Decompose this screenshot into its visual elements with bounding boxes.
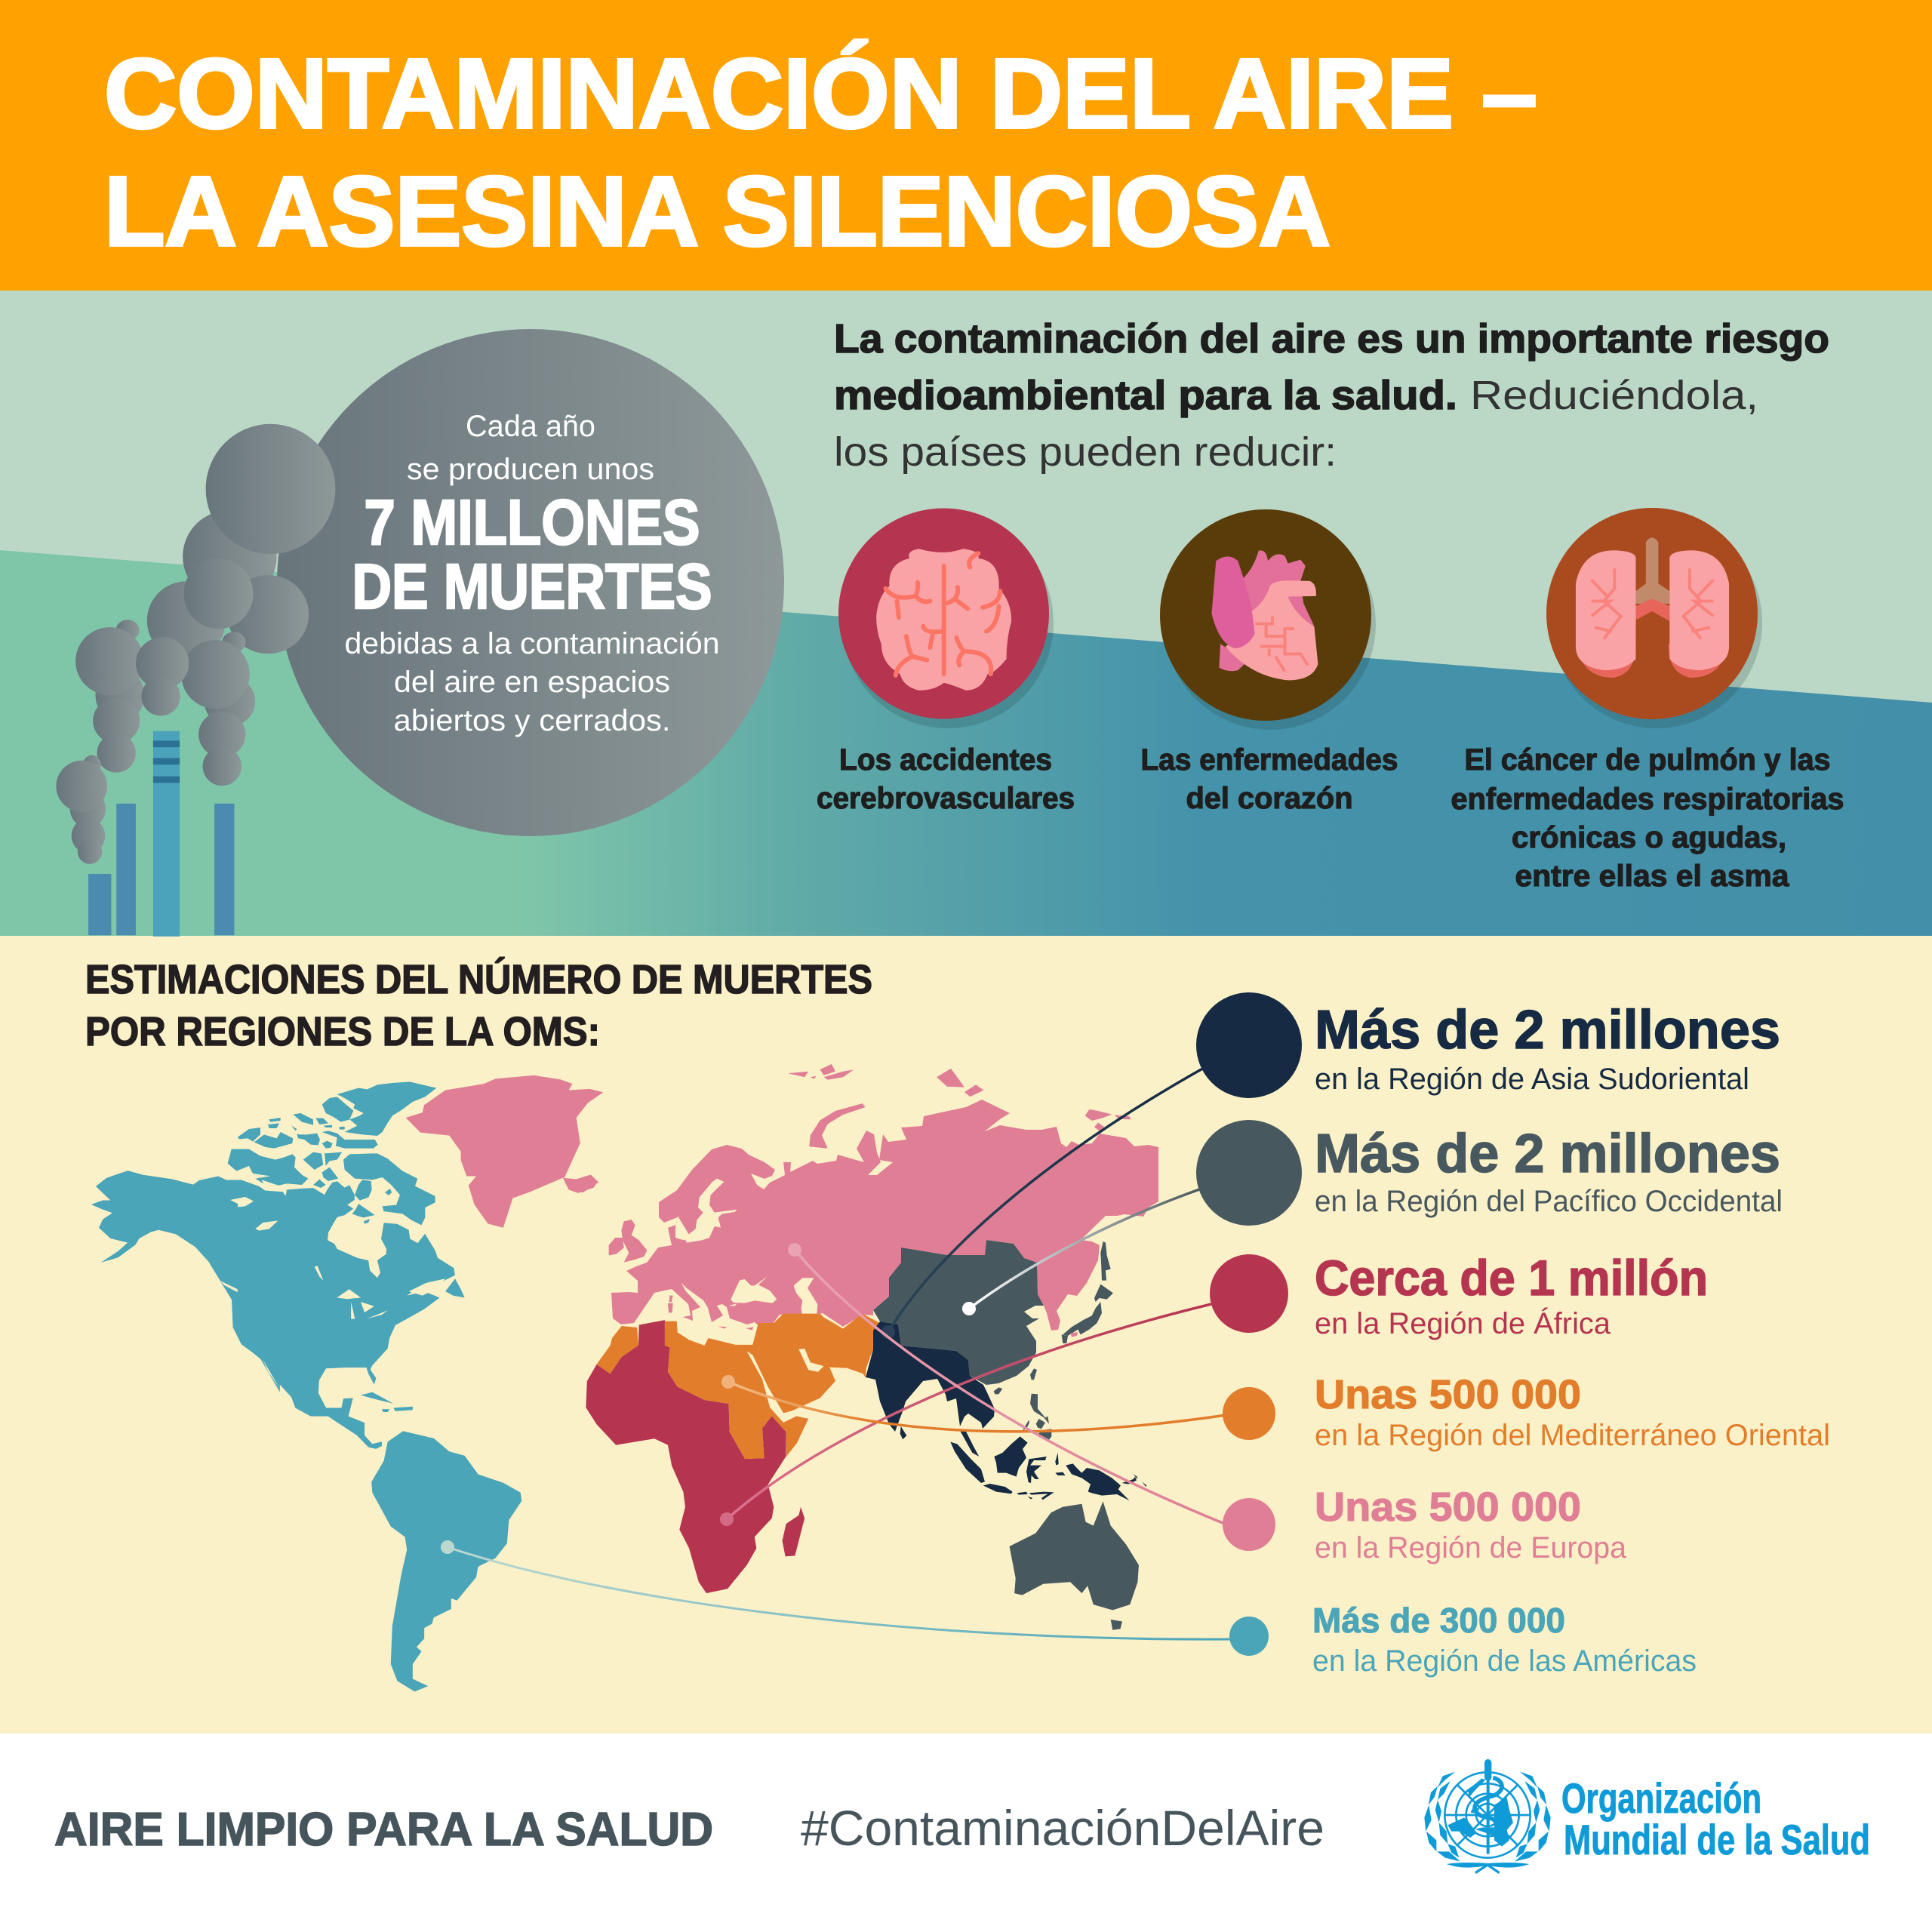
- text block: lungs caption: [1451, 743, 1844, 893]
- stat: South-East Asia: [1196, 992, 1780, 1098]
- stat: Africa: en la Región de África: [1315, 1306, 1611, 1340]
- text block: heart caption: del corazón: [1186, 782, 1352, 815]
- WHO wordmark: [1561, 1774, 1870, 1863]
- map: world regions: [91, 1064, 1158, 1691]
- region: Western Pacific: [873, 1240, 1113, 1441]
- stat: Americas: [1229, 1601, 1697, 1678]
- circle text: del aire en espacios: [394, 666, 670, 699]
- stat: Africa: [1210, 1250, 1708, 1340]
- circle text: se producen unos: [407, 453, 654, 486]
- stat: Americas: en la Región de las Américas: [1312, 1644, 1697, 1678]
- circle text: abiertos y cerrados.: [394, 704, 670, 737]
- arrow: South-East Asia connector: [881, 1067, 1205, 1339]
- arrow: Eastern Mediterranean connector: [721, 1375, 1226, 1432]
- text block: lungs caption: crónicas o agudas,: [1512, 821, 1786, 854]
- text block: lungs caption: El cáncer de pulmón y las: [1464, 743, 1831, 777]
- arrow: Western Pacific connector: [962, 1189, 1201, 1315]
- seas in the Middle East: [747, 1349, 866, 1423]
- icon: brain: [838, 509, 1054, 728]
- heading: estimates by WHO region: POR REGIONES DE LA OMS:: [85, 1009, 600, 1054]
- text block: headline on air pollution: Reduciéndola,: [1470, 373, 1758, 418]
- stat: Western Pacific: [1196, 1120, 1783, 1226]
- stat: Eastern Mediterranean: Unas 500 000: [1315, 1372, 1581, 1417]
- laurel leaves: [1424, 1772, 1551, 1868]
- text block: brain caption: [817, 743, 1075, 815]
- stat: Western Pacific: en la Región del Pacífico Occidental: [1315, 1185, 1783, 1218]
- header banner: [0, 0, 1932, 291]
- text block: heart caption: Las enfermedades: [1141, 743, 1398, 777]
- stat: Western Pacific: Más de 2 millones: [1315, 1124, 1780, 1184]
- text block: headline on air pollution: los países pueden reducir:: [834, 429, 1337, 475]
- title: [104, 38, 1537, 266]
- panel: big smoke circle with deaths statistic: [277, 329, 784, 836]
- text block: headline on air pollution: medioambiental para la salud.: [834, 373, 1457, 418]
- icon: WHO emblem: [1424, 1763, 1551, 1873]
- panel: mint and teal background: [0, 291, 1932, 936]
- inland seas of Europe: [675, 1179, 817, 1321]
- circle text: [344, 410, 720, 737]
- text block: lungs caption: enfermedades respiratorias: [1451, 783, 1844, 816]
- region: Europe: [406, 1064, 1158, 1331]
- WHO wordmark: Organización: [1561, 1774, 1761, 1822]
- region: Australia: [1010, 1501, 1139, 1630]
- text block: lungs caption: entre ellas el asma: [1515, 860, 1789, 893]
- title: CONTAMINACIÓN DEL AIRE –: [104, 38, 1537, 149]
- region: Eastern Mediterranean: [597, 1314, 880, 1459]
- arrow: Americas connector: [441, 1540, 1232, 1639]
- icon: factory chimneys with smoke: [56, 424, 335, 937]
- text block: heart caption: [1141, 743, 1398, 815]
- circle text: 7 MILLONES: [364, 487, 700, 558]
- panel: footer: [0, 1734, 1932, 1932]
- arrow: Europe connector: [788, 1243, 1226, 1524]
- text block: brain caption: cerebrovasculares: [817, 782, 1075, 815]
- footer slogan: AIRE LIMPIO PARA LA SALUD: [54, 1804, 713, 1856]
- stat: South-East Asia: Más de 2 millones: [1315, 1000, 1780, 1060]
- background: cream map section: [0, 936, 1932, 1736]
- lakes: [206, 1180, 445, 1389]
- circle text: Cada año: [466, 410, 595, 443]
- text block: headline on air pollution: [834, 316, 1829, 475]
- stat: Europe: Unas 500 000: [1315, 1484, 1581, 1530]
- heading: estimates by WHO region: ESTIMACIONES DEL NÚMERO DE MUERTES: [85, 957, 872, 1002]
- stat: Europe: [1223, 1484, 1627, 1564]
- icon: lungs: [1546, 508, 1762, 728]
- heading: estimates by WHO region: [85, 957, 872, 1054]
- stat: Americas: Más de 300 000: [1312, 1601, 1565, 1640]
- arrow: Africa connector: [720, 1304, 1211, 1526]
- region: South-East Asia: [866, 1321, 1146, 1500]
- stat: Eastern Mediterranean: en la Región del Mediterráneo Oriental: [1315, 1419, 1830, 1452]
- title: LA ASESINA SILENCIOSA: [104, 155, 1331, 266]
- text block: brain caption: Los accidentes: [839, 743, 1052, 777]
- region: Americas: [91, 1081, 521, 1691]
- region: Africa: [586, 1320, 804, 1593]
- text block: headline on air pollution: La contaminación del aire es un importante riesgo: [834, 316, 1829, 361]
- stat: South-East Asia: en la Región de Asia Sudoriental: [1315, 1063, 1749, 1096]
- circle text: DE MUERTES: [352, 551, 712, 622]
- stat: Eastern Mediterranean: [1223, 1372, 1830, 1452]
- icon: heart: [1160, 509, 1376, 730]
- stat: Africa: Cerca de 1 millón: [1315, 1250, 1708, 1306]
- stat: Europe: en la Región de Europa: [1315, 1531, 1627, 1564]
- circle text: debidas a la contaminación: [344, 627, 720, 660]
- footer hashtag: #ContaminaciónDelAire: [801, 1800, 1324, 1856]
